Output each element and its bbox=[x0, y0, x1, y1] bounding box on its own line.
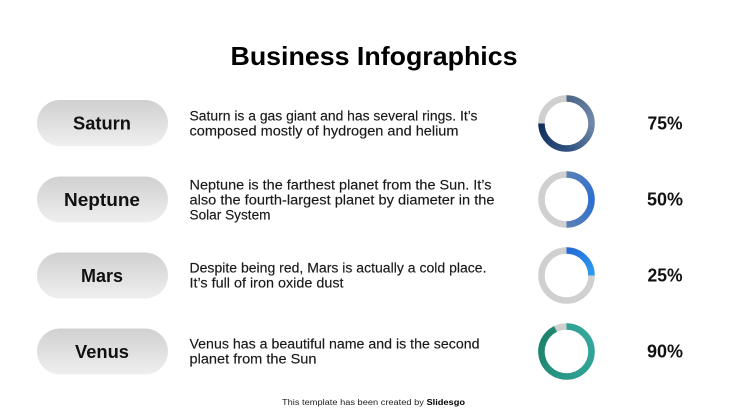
value: 75%: 75% bbox=[648, 114, 682, 134]
donut chart: Neptune 50% bbox=[542, 174, 592, 224]
row: Neptune bbox=[37, 174, 683, 224]
row: Saturn bbox=[37, 98, 682, 148]
text: Venus description: Venus has a beautiful name and is the second bbox=[190, 336, 480, 352]
text: Neptune description: Solar System bbox=[190, 208, 270, 222]
pill: Neptune bbox=[37, 176, 168, 222]
text: Venus description: planet from the Sun bbox=[190, 352, 316, 366]
value: 90%: 90% bbox=[647, 342, 683, 362]
text: Mars description: Despite being red, Mars is actually a cold place. bbox=[190, 260, 486, 276]
text: Saturn description bbox=[190, 108, 478, 138]
text: Neptune description bbox=[190, 178, 494, 222]
pill: Neptune: Neptune bbox=[64, 190, 140, 210]
text: Venus description bbox=[190, 336, 480, 366]
footer credit: This template has been created by Slidesgo bbox=[282, 398, 465, 407]
pill: Mars bbox=[37, 252, 168, 298]
pill: Venus bbox=[37, 328, 168, 374]
text: Mars description: It’s full of iron oxide dust bbox=[190, 276, 344, 290]
pill: Saturn: Saturn bbox=[73, 114, 131, 134]
text: Neptune description: also the fourth-largest planet by diameter in the bbox=[190, 192, 494, 208]
title: Business Infographics bbox=[230, 41, 518, 71]
text: Neptune description: Neptune is the farthest planet from the Sun. It’s bbox=[190, 178, 492, 192]
row: Mars bbox=[37, 250, 682, 300]
value: 50%: 50% bbox=[647, 190, 683, 210]
pill: Mars: Mars bbox=[81, 266, 123, 286]
donut chart: Mars 25% bbox=[542, 250, 592, 300]
value: 25%: 25% bbox=[648, 266, 682, 286]
text: Saturn description: composed mostly of hydrogen and helium bbox=[190, 124, 458, 138]
pill: Saturn bbox=[37, 100, 168, 146]
text: Mars description bbox=[190, 260, 486, 290]
donut chart: Saturn 75% bbox=[542, 98, 592, 148]
row: Venus bbox=[37, 326, 683, 377]
pill: Venus: Venus bbox=[75, 342, 129, 362]
text: Saturn description: Saturn is a gas giant and has several rings. It’s bbox=[190, 108, 478, 124]
donut chart: Venus 90% bbox=[541, 326, 592, 377]
